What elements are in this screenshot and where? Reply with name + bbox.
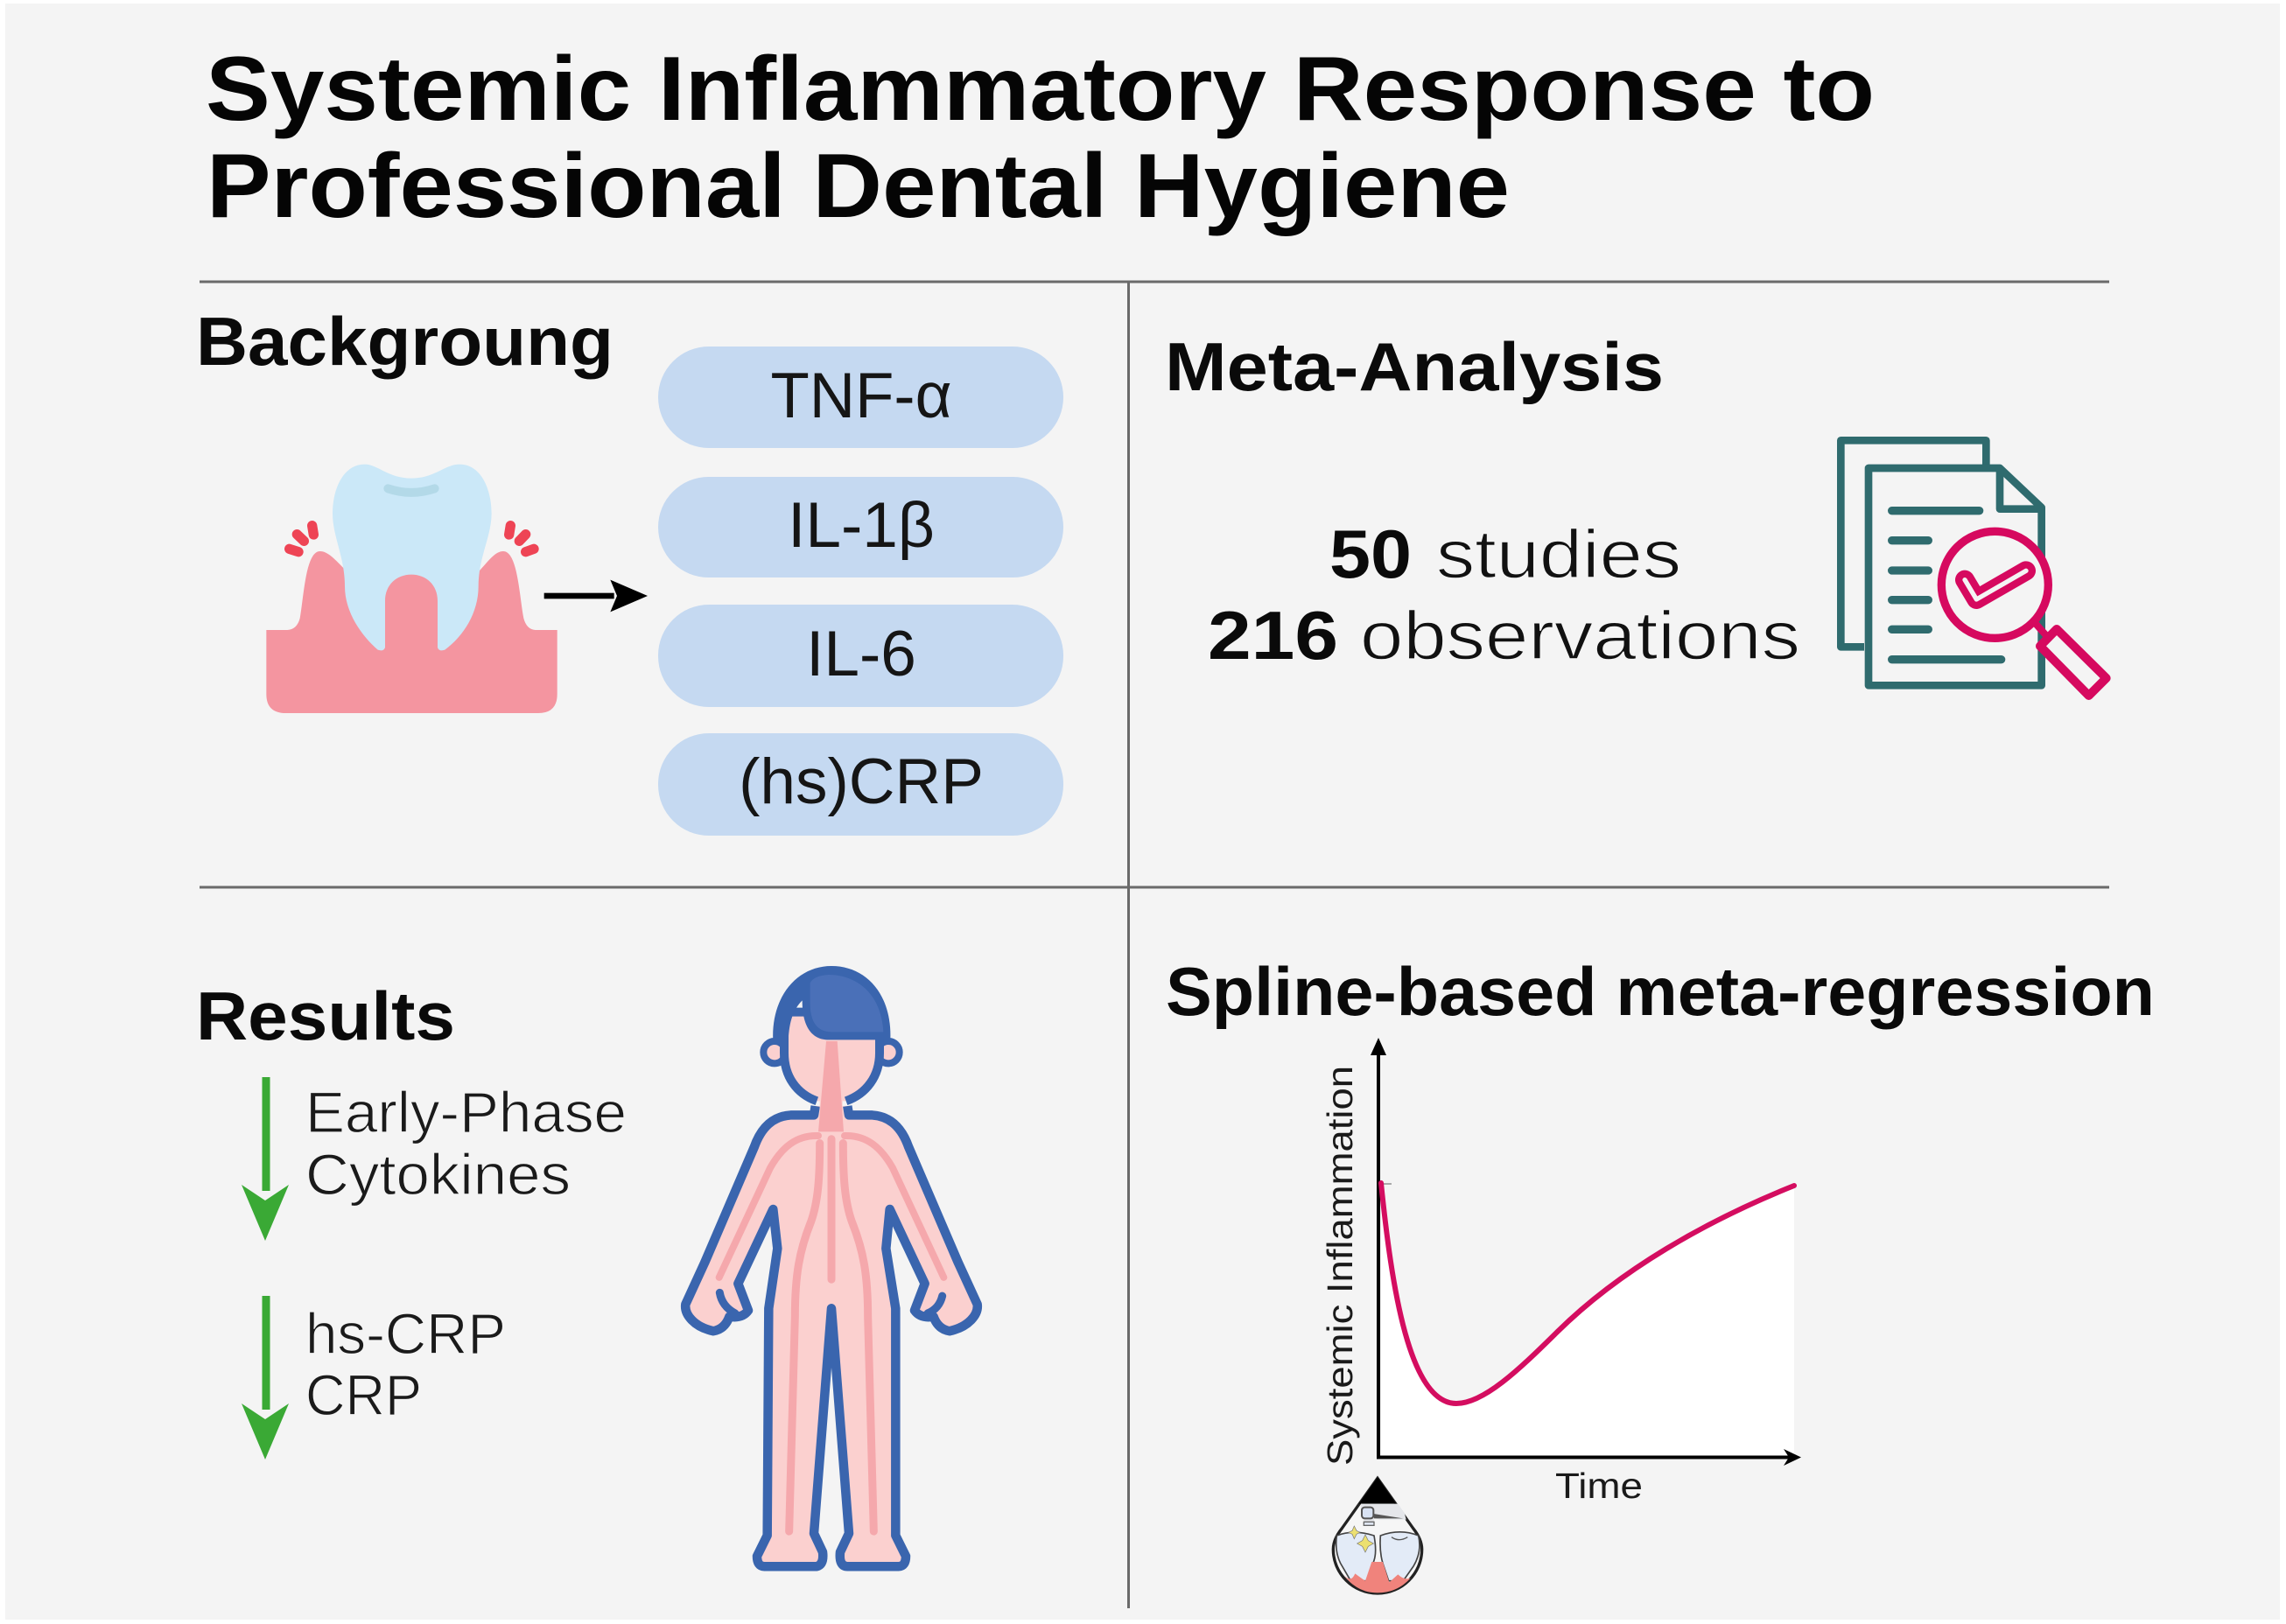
pill: TNF-alpha: TNF-α <box>770 360 952 431</box>
y-axis label: Systemic Inflammation <box>1320 1066 1360 1466</box>
text: study counts: 50 <box>1329 515 1412 592</box>
heading: Results: Results <box>196 977 455 1054</box>
pill: IL-6 <box>658 605 1063 707</box>
text: study counts: studies <box>1436 515 1681 592</box>
panel: background <box>196 303 1063 836</box>
heading: Backgroung: Backgroung <box>196 303 614 380</box>
title: Systemic Inflammatory Response to <box>206 38 1875 140</box>
heading: Meta-Analysis: Meta-Analysis <box>1165 328 1664 405</box>
text: early-phase cytokines: Early-Phase <box>305 1080 627 1144</box>
chart: inflammation over time <box>1320 1038 1801 1506</box>
x-axis label: Time <box>1555 1466 1643 1506</box>
icon: documents with magnifier <box>1841 440 2107 696</box>
pill: IL-1beta <box>658 477 1063 578</box>
pill: IL-1beta: IL-1β <box>788 490 935 561</box>
text: hs-CRP and CRP <box>305 1301 506 1427</box>
heading: Spline-based meta-regression: Spline-based meta-regression <box>1166 953 2155 1030</box>
text: early-phase cytokines <box>305 1080 627 1207</box>
text: hs-CRP and CRP: hs-CRP <box>305 1301 506 1366</box>
text: hs-CRP and CRP: CRP <box>305 1362 422 1427</box>
title: Professional Dental Hygiene <box>207 136 1510 237</box>
pill: IL-6: IL-6 <box>806 619 916 690</box>
text: study counts: 216 <box>1208 597 1338 674</box>
pill: hs-CRP: (hs)CRP <box>739 746 984 817</box>
text: study counts: observations <box>1360 597 1800 674</box>
text: early-phase cytokines: Cytokines <box>305 1142 571 1207</box>
pill: hs-CRP <box>658 733 1063 836</box>
pill: TNF-alpha <box>658 346 1063 448</box>
arrow: CRP decrease <box>242 1296 289 1460</box>
text: study counts <box>1208 515 1800 674</box>
title <box>206 38 1875 237</box>
icon: inflamed tooth and gum <box>266 465 557 713</box>
icon: human body with vessels <box>685 966 978 1566</box>
icon: dental hygiene drop marker <box>1333 1477 1422 1593</box>
arrow: tooth to cytokines <box>544 580 648 612</box>
arrow: cytokines decrease <box>242 1077 289 1241</box>
panel: spline-based meta-regression <box>1166 953 2155 1593</box>
panel: meta-analysis <box>1165 328 2107 696</box>
panel: results <box>196 966 978 1566</box>
